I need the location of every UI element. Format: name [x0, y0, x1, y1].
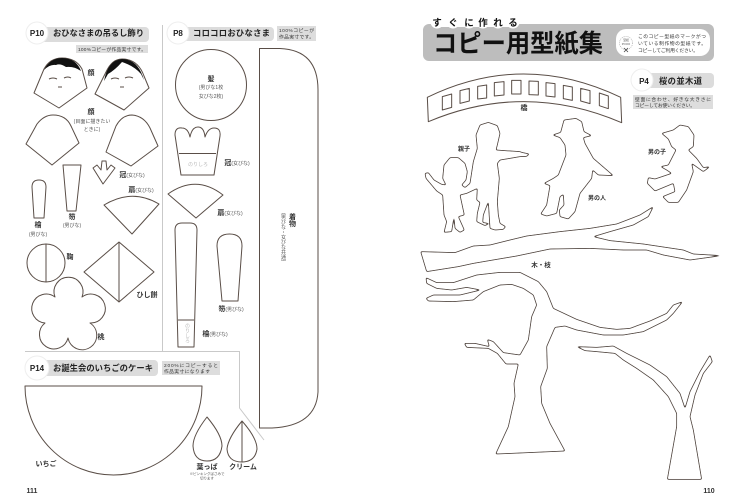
callout: copy mark note: [616, 29, 710, 56]
page number 111: 111: [27, 488, 38, 495]
icon: crown: [93, 161, 115, 184]
label: peach: 桃: [98, 332, 104, 341]
icon: parent and child silhouette: [425, 122, 529, 232]
label: leaf: ※ピンキングばさみで: [190, 471, 225, 476]
heading: P14: お誕生会のいちごのケーキ: [53, 363, 153, 373]
icon: kimono: [260, 48, 318, 428]
callout: copy mark note: いている制作物の型紙です。: [638, 40, 706, 47]
icon: crown: [175, 127, 220, 175]
icon: long hinoki fan: のりしろ: [184, 323, 190, 344]
panel: title banner: [423, 16, 714, 61]
label: hair: 女びな2枚): [199, 93, 224, 100]
heading: P10: [26, 22, 149, 44]
icon: shaku: [63, 165, 81, 211]
label: shaku: [63, 212, 81, 229]
label: face: (目面に描きたい: [74, 118, 110, 125]
note: P4: 壁面に合わせ、好きな大きさに: [635, 96, 711, 103]
note: 200% copy: [162, 361, 220, 375]
heading: P10: P10: [30, 29, 45, 38]
label: fan: 扇(女びな): [128, 186, 154, 194]
label: man: 男の人: [588, 195, 606, 202]
label: face: 顔: [88, 68, 94, 77]
subtitle bubbles: に: [464, 18, 474, 29]
label: face: 顔: [88, 107, 94, 116]
icon: leaf: [193, 417, 222, 461]
panel: P10 hanging hina decoration: [26, 22, 159, 350]
label: hinoki fan: (男びな): [29, 231, 47, 238]
label: boy: 男の子: [648, 149, 666, 156]
label: face: ときに): [84, 126, 101, 133]
icon: large tree: [426, 272, 683, 454]
icon: female face: [95, 59, 149, 110]
panel: P4 cherry tree path heading: [631, 69, 714, 91]
heading: P10: おひなさまの吊るし飾り: [53, 28, 144, 38]
subtitle bubbles: [430, 16, 520, 29]
label: strawberry: いちご: [36, 459, 56, 468]
subtitle bubbles: 作: [478, 17, 488, 29]
icon: cream: [227, 421, 257, 462]
icon: small tree: [577, 346, 712, 479]
label: shaku: (男びな): [63, 222, 81, 229]
label: parent and child: 親子: [458, 145, 470, 153]
label: temari: 鞠: [66, 252, 74, 261]
callout: copy mark note: コピーしてご利用ください。: [638, 47, 698, 54]
panel: P14 strawberry cake: [25, 356, 257, 480]
subtitle bubbles: ぐ: [448, 18, 458, 29]
label: kimono: (男びな・女びな共通): [280, 213, 286, 262]
note: P4: [633, 95, 713, 109]
icon: peach flower: [32, 277, 105, 350]
label: cream: クリーム: [229, 462, 257, 471]
icon: shaku: [217, 234, 242, 301]
label: hair: [199, 74, 224, 100]
icon: strawberry half circle: [25, 386, 202, 475]
label: kimono: 着物: [288, 212, 296, 228]
label: kimono: [280, 212, 296, 262]
icon: bridge: [427, 74, 622, 123]
panel: P8 rolling hina: [167, 22, 318, 428]
icon: male face: [34, 58, 87, 108]
heading: P8: [167, 22, 274, 44]
icon: hinoki fan: [32, 180, 46, 218]
title: コピー用型紙集: [433, 30, 603, 58]
icon: hair circle: [176, 50, 246, 120]
callout: copy mark note: 型紙: [623, 38, 629, 42]
callout: copy mark note: POOO: [622, 42, 631, 46]
heading: P14: P14: [30, 364, 45, 373]
note: 200% copy: 200%にコピーすると: [164, 363, 218, 369]
label: hinoki fan: 檜(男びな): [202, 329, 228, 338]
note: 100% copy: 100%コピーが作品実寸です。: [78, 46, 146, 53]
label: face: [74, 68, 110, 133]
label: crown: 冠(女びな): [119, 171, 145, 179]
heading: P14: [25, 356, 158, 380]
label: hinoki fan: 檜: [34, 220, 42, 229]
label: leaf: 葉っぱ: [196, 462, 218, 471]
label: hinoki fan: [29, 220, 47, 238]
note: 100% copy: 100%コピーが: [279, 27, 314, 34]
label: leaf: 切ります: [200, 476, 214, 480]
icon: fan: [168, 184, 223, 218]
label: crown: 冠(女びな): [224, 159, 250, 167]
label: leaf: [190, 462, 225, 480]
note: 200% copy: 作品実寸になります: [164, 368, 210, 375]
label: diamond rice cake: ひし餅: [136, 290, 158, 299]
panel: P4 cherry tree path heading: 桜の並木道: [659, 76, 703, 86]
icon: long hinoki fan: [175, 223, 197, 347]
icon: fan: [104, 196, 159, 234]
icon: branch: [421, 207, 722, 272]
label: fan: 扇(女びな): [217, 209, 243, 217]
note: 100% copy: 作品実寸です。: [279, 34, 314, 40]
icon: boy silhouette: [647, 125, 710, 202]
note: 100% copy: [76, 45, 148, 53]
note: 100% copy: [277, 26, 316, 41]
icon: man silhouette: [541, 118, 613, 219]
label: hair: 髪: [208, 74, 214, 83]
icon: crown: のりしろ: [188, 162, 208, 168]
label: hair: (男びな1枚: [199, 84, 223, 91]
heading: P8: P8: [173, 29, 183, 38]
heading: P8: コロコロおひなさま: [193, 28, 270, 38]
label: shaku: 笏: [68, 212, 76, 221]
label: shaku: 笏(男びな): [218, 304, 244, 313]
icon: temari ball: [27, 244, 65, 282]
label: bridge: 橋: [520, 103, 528, 112]
subtitle bubbles: れ: [493, 18, 503, 29]
label: tree and branch: 木・枝: [531, 260, 551, 269]
page number 110: 110: [703, 488, 715, 495]
subtitle bubbles: る: [508, 18, 518, 29]
subtitle bubbles: す: [432, 18, 442, 29]
callout: copy mark note: このコピー型紙のマークがつ: [638, 33, 706, 40]
panel: P4 cherry tree path heading: P4: [639, 77, 649, 86]
icon: blank faces: [26, 115, 158, 166]
note: P4: コピーしてお使いください。: [635, 102, 695, 109]
icon: diamond rice cake: [84, 242, 154, 302]
